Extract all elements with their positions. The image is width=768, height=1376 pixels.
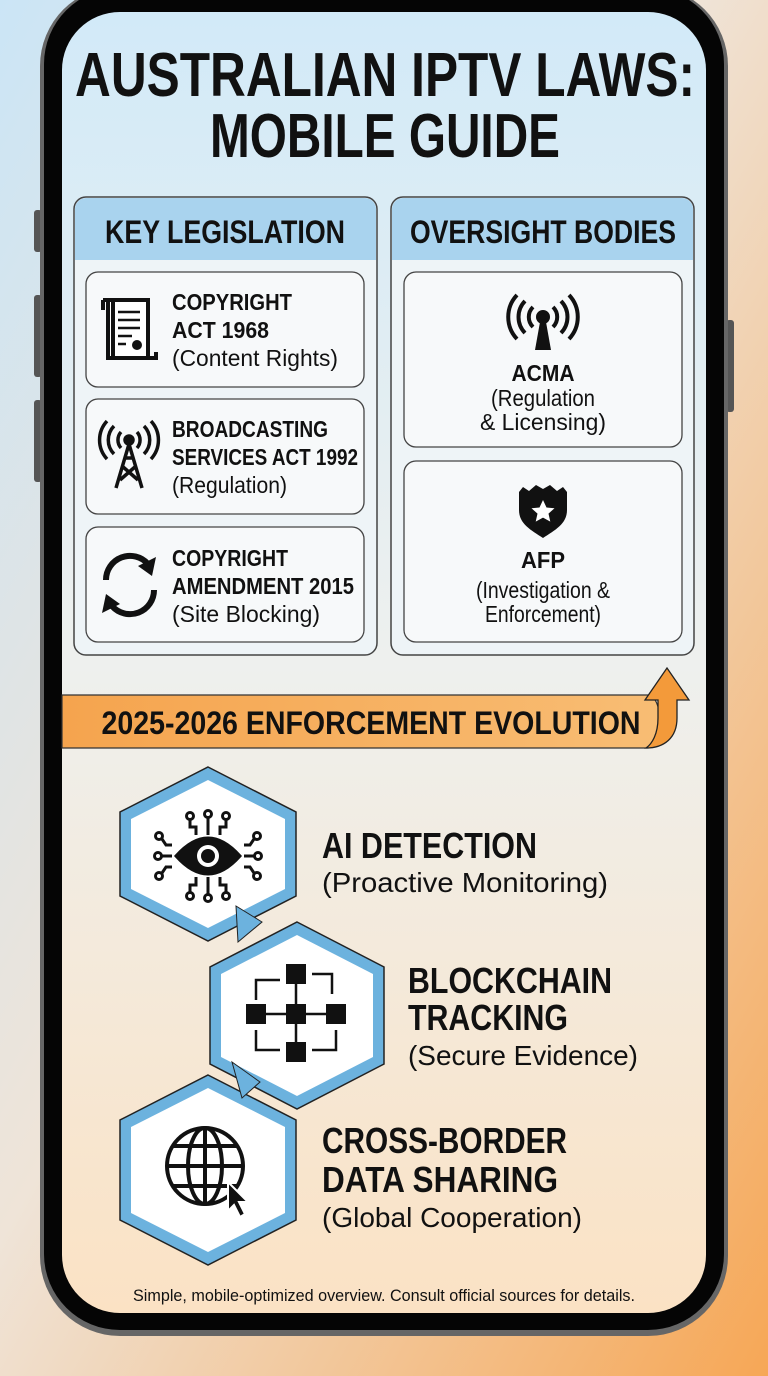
card: AFP: (Investigation & — [476, 577, 610, 603]
card: copyright amendment 2015: (Site Blocking) — [172, 601, 320, 627]
card: ACMA: & Licensing) — [480, 409, 606, 435]
text: cross-border data sharing: CROSS-BORDER — [322, 1120, 567, 1161]
text: cross-border data sharing: DATA SHARING — [322, 1159, 558, 1200]
card: broadcasting services act — [86, 399, 364, 514]
icon: scroll document — [103, 300, 156, 358]
card: copyright act 1968: (Content Rights) — [172, 345, 338, 371]
heading: oversight bodies: OVERSIGHT BODIES — [410, 214, 676, 250]
icon: antenna signal — [508, 295, 578, 339]
card: copyright amendment 2015: AMENDMENT 2015 — [172, 573, 354, 599]
text: AI detection — [322, 825, 608, 898]
card: ACMA — [404, 272, 682, 447]
footer note: Simple, mobile-optimized overview. Consult official sources for details. — [133, 1286, 635, 1305]
text: blockchain tracking — [408, 960, 638, 1071]
icon: globe with cursor — [167, 1128, 243, 1204]
card: AFP: AFP — [521, 547, 565, 573]
text: blockchain tracking: TRACKING — [408, 997, 568, 1038]
card: AFP — [404, 461, 682, 642]
heading: key legislation: KEY LEGISLATION — [105, 214, 345, 250]
icon: blockchain cubes — [246, 964, 346, 1062]
text: AI detection: (Proactive Monitoring) — [322, 867, 608, 898]
card: copyright amendment 2015: COPYRIGHT — [172, 545, 288, 571]
arrow: upward — [645, 668, 689, 748]
text: AI detection: AI DETECTION — [322, 825, 537, 866]
card: broadcasting services act: SERVICES ACT 1992 — [172, 444, 358, 470]
card: AFP: Enforcement) — [485, 601, 601, 627]
card: broadcasting services act: (Regulation) — [172, 472, 287, 498]
connector arrow — [232, 1062, 260, 1098]
panel: oversight bodies — [391, 197, 694, 655]
card: copyright act 1968: COPYRIGHT — [172, 289, 292, 315]
icon: police shield — [519, 485, 567, 538]
card: ACMA: (Regulation — [491, 385, 595, 411]
connector arrow — [236, 906, 262, 942]
card: copyright act 1968: ACT 1968 — [172, 317, 269, 343]
card: copyright amendment 2015 — [86, 527, 364, 642]
hexagon: AI detection — [120, 767, 296, 941]
panel: key legislation — [74, 197, 377, 655]
title — [75, 41, 695, 171]
hexagon: blockchain tracking — [210, 906, 384, 1109]
banner: enforcement evolution: 2025-2026 ENFORCEMENT EVOLUTION — [102, 705, 640, 741]
banner: enforcement evolution — [62, 668, 689, 748]
icon: broadcast tower — [100, 421, 158, 488]
text: cross-border data sharing: (Global Cooperation) — [322, 1202, 582, 1233]
icon: AI eye — [154, 810, 262, 902]
text: blockchain tracking: (Secure Evidence) — [408, 1040, 638, 1071]
icon: refresh arrows — [106, 556, 154, 614]
text: cross-border data sharing — [322, 1120, 582, 1233]
card: ACMA: ACMA — [512, 360, 574, 386]
text: blockchain tracking: BLOCKCHAIN — [408, 960, 612, 1001]
card: broadcasting services act: BROADCASTING — [172, 416, 328, 442]
title: MOBILE GUIDE — [210, 102, 560, 171]
card: copyright act 1968 — [86, 272, 364, 387]
hexagon: cross-border data sharing — [120, 1062, 296, 1265]
